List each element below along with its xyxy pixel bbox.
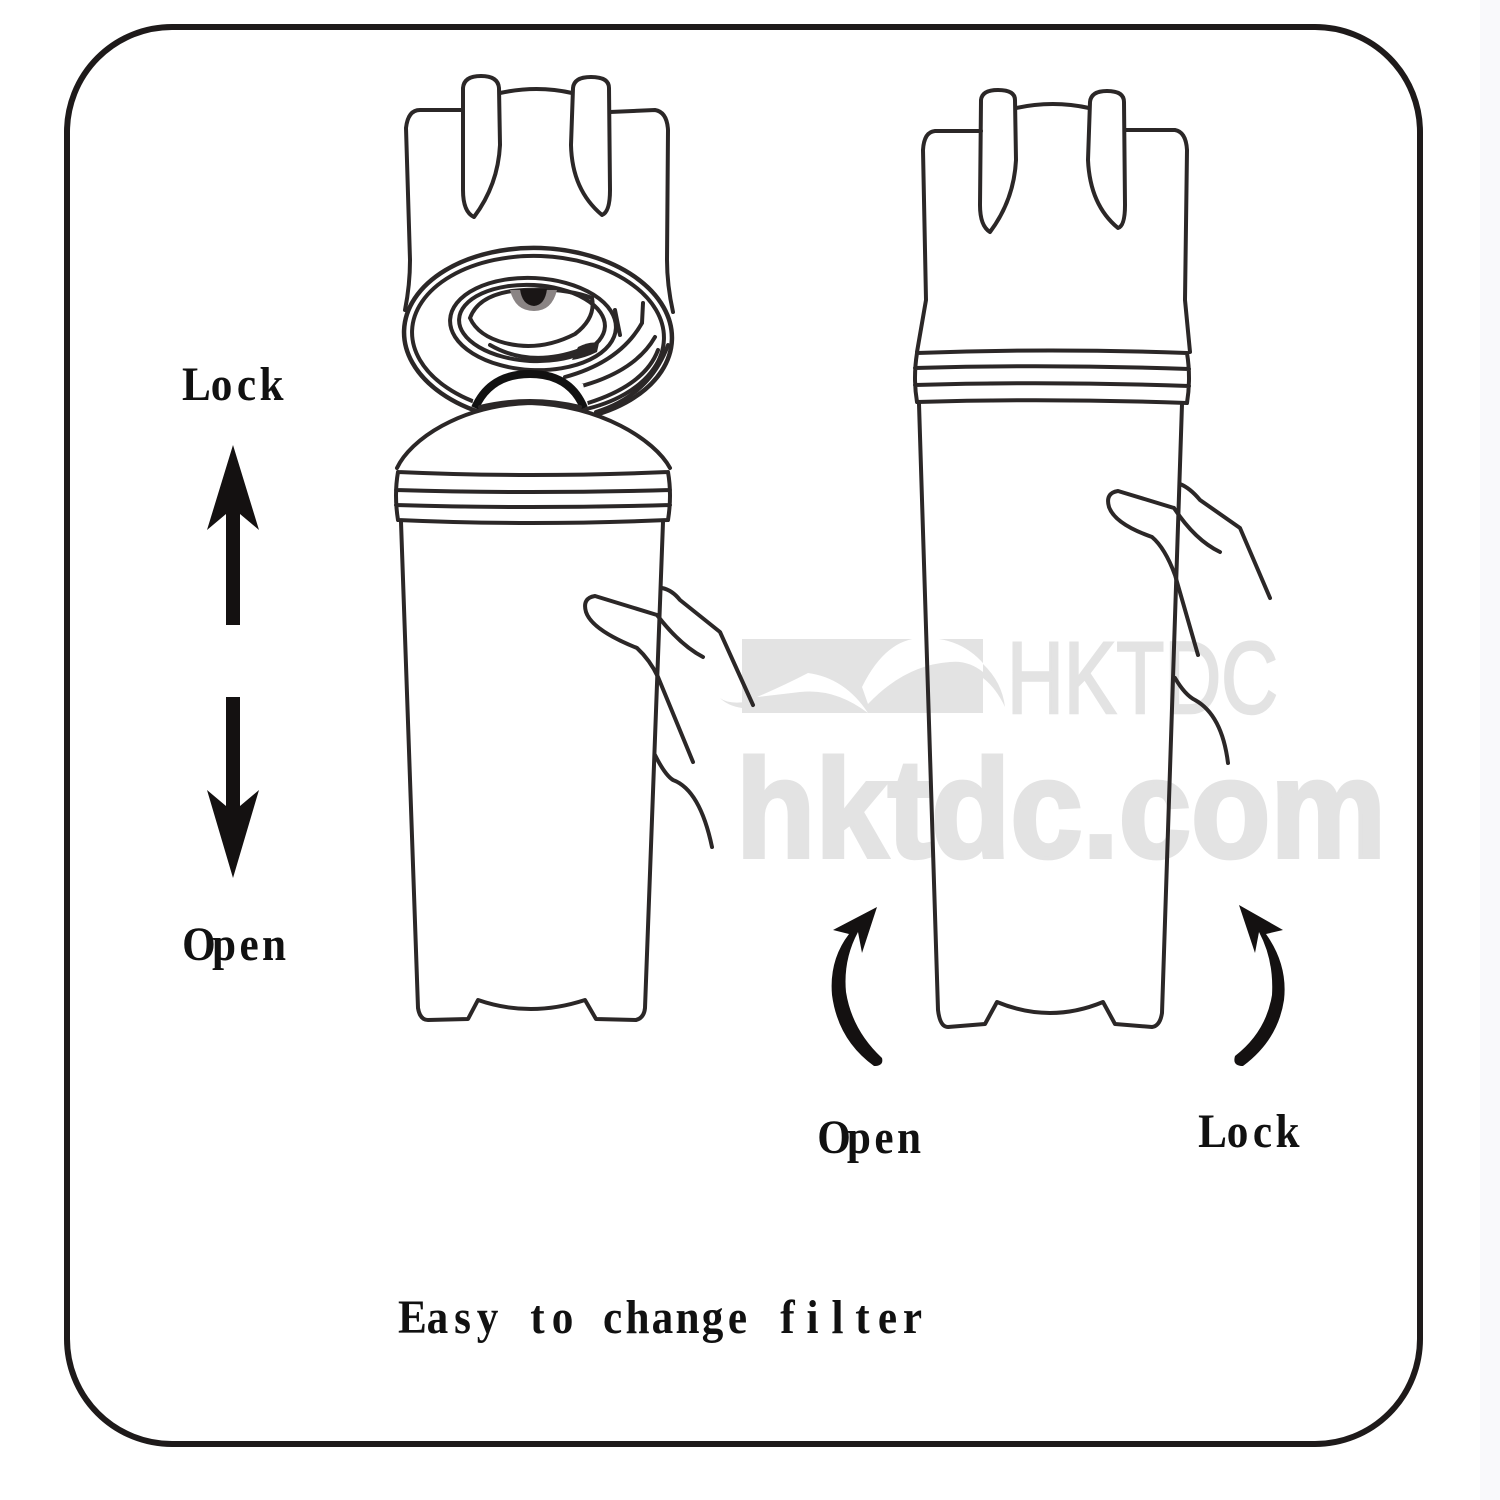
cap tab right [571, 77, 610, 215]
hand [585, 588, 753, 847]
o-ring [472, 384, 588, 405]
illustration: right filter housing assembled [915, 90, 1270, 1027]
housing bands [915, 350, 1189, 403]
arrow: down open [207, 697, 259, 878]
cap threaded rings [401, 243, 675, 427]
cap outline [917, 104, 1190, 352]
watermark: HKTDC logo [720, 621, 1278, 735]
cap tab left [980, 90, 1016, 232]
arrow: curved lock [1234, 905, 1285, 1066]
housing bands [396, 472, 670, 523]
cap tab left [463, 76, 500, 217]
housing body [401, 522, 663, 1020]
illustration: left filter housing with cap removed [396, 76, 753, 1020]
watermark: hktdc.com: hktdc.com [736, 730, 1386, 887]
label: open right: Open [817, 1110, 921, 1164]
outlet hole [510, 290, 557, 311]
arrow: curved open [832, 907, 882, 1066]
eye opening [470, 290, 593, 346]
cap outline [405, 89, 673, 312]
label: lock right: Lock [1198, 1104, 1300, 1158]
hand [1108, 484, 1270, 763]
label: lock left: Lock [182, 357, 284, 411]
label: open left: Open [182, 917, 286, 971]
caption: Easy to change filter [398, 1290, 922, 1344]
watermark: HKTDC logo: HKTDC [1007, 621, 1278, 735]
housing body [919, 404, 1182, 1027]
dome top and body mask [397, 403, 670, 525]
cap tab right [1088, 91, 1125, 228]
arrow: up lock [207, 445, 259, 625]
